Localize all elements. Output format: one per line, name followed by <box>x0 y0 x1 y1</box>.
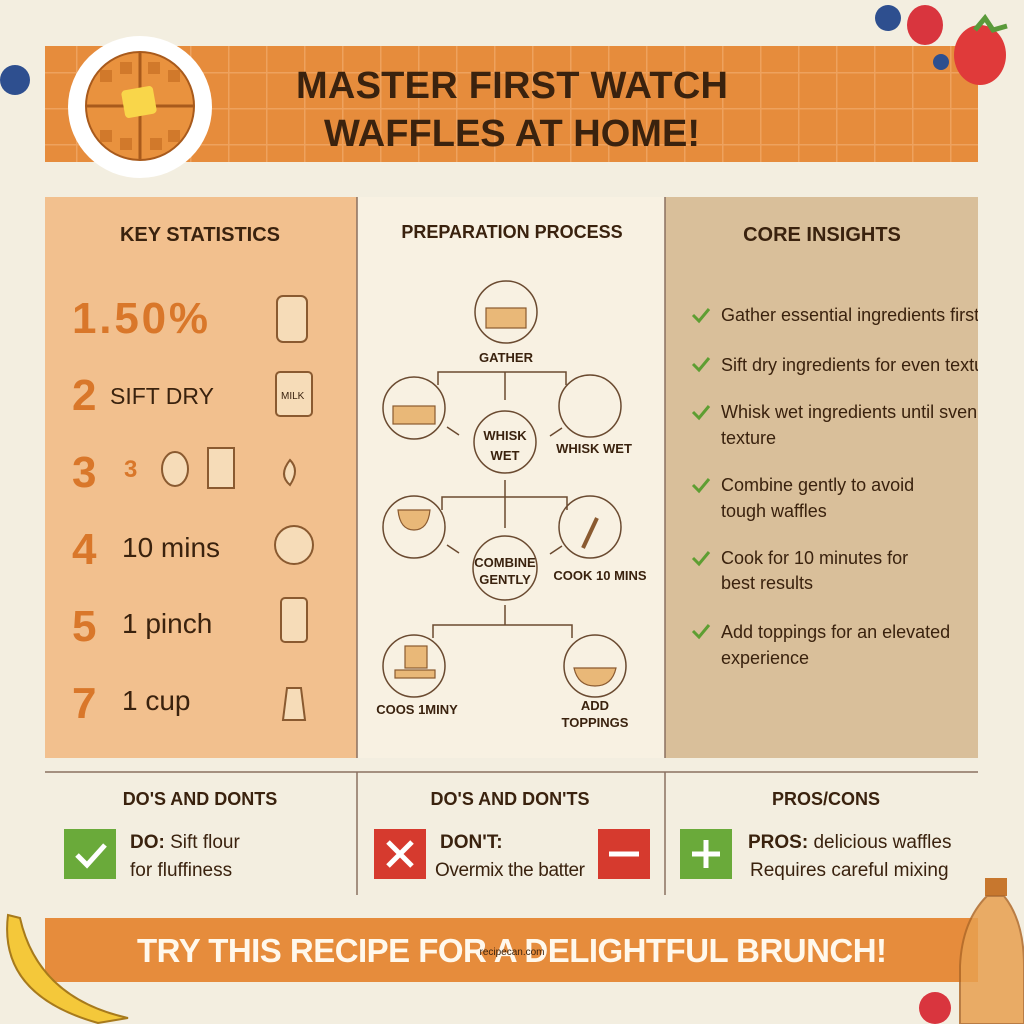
panel: core insights: Gather essential ingredients first <box>721 305 979 325</box>
panel: key statistics: 10 mins <box>122 532 220 563</box>
panel: key statistics: MILK <box>281 391 305 402</box>
panel: core insights: experience <box>721 648 809 668</box>
dont's: DON'T: <box>440 832 503 853</box>
panel: preparation process <box>357 197 665 758</box>
icon: berries <box>0 5 1007 95</box>
pros/cons: PROS: delicious waffles <box>748 832 951 853</box>
panel: key statistics: 1 cup <box>122 685 190 716</box>
panel: preparation process: WET <box>491 448 519 463</box>
panel: core insights: Cook for 10 minutes for <box>721 548 908 568</box>
do's <box>64 789 277 881</box>
title: MASTER FIRST WATCH <box>296 65 728 107</box>
do's: for fluffiness <box>130 860 232 881</box>
panel: preparation process: PREPARATION PROCESS <box>401 222 623 242</box>
icon: syrup bottle <box>919 878 1024 1024</box>
footer banner: recipecan.com <box>479 947 545 958</box>
pros/cons: PROS/CONS <box>772 789 880 809</box>
panel: key statistics: 1.50% <box>72 294 208 343</box>
panel: core insights: texture <box>721 428 776 448</box>
panel: core insights: best results <box>721 573 813 593</box>
panel: key statistics: SIFT DRY <box>110 383 214 409</box>
do's: DO'S AND DONTS <box>123 789 277 809</box>
panel: core insights: Sift dry ingredients for even textu <box>721 355 984 375</box>
panel: preparation process: COOS 1MINY <box>376 702 458 717</box>
panel: key statistics: 5 <box>72 602 96 651</box>
footer banner <box>45 918 978 982</box>
panel: preparation process: GATHER <box>479 350 534 365</box>
panel: key statistics: 1 pinch <box>122 608 212 639</box>
panel: core insights: CORE INSIGHTS <box>743 224 901 246</box>
dont's: DO'S AND DON'TS <box>431 789 589 809</box>
footer banner: TRY THIS RECIPE FOR A DELIGHTFUL BRUNCH! <box>137 932 887 969</box>
panel: preparation process: WHISK WET <box>556 441 632 456</box>
panel: preparation process: ADD <box>581 698 609 713</box>
dont's <box>374 789 650 881</box>
dont's: Overmix the batter <box>435 860 586 881</box>
panel: key statistics: 7 <box>72 679 96 728</box>
panel: core insights: Add toppings for an elevated <box>721 622 950 642</box>
header banner <box>45 46 978 162</box>
do's: DO: Sift flour <box>130 832 240 853</box>
pros/cons <box>680 789 951 881</box>
icon: waffle plate <box>68 36 212 178</box>
icon: banana <box>7 915 128 1023</box>
header banner: WAFFLES AT HOME! <box>324 113 700 155</box>
icons: stats <box>162 296 313 720</box>
panel: key statistics: 4 <box>72 525 97 574</box>
panel: preparation process: COOK 10 MINS <box>553 568 647 583</box>
panel: preparation process: WHISK <box>483 428 527 443</box>
pros/cons: Requires careful mixing <box>750 860 949 881</box>
panel: key statistics: 3 <box>72 448 96 497</box>
panel: preparation process: TOPPINGS <box>562 715 629 730</box>
panel: key statistics: KEY STATISTICS <box>120 224 280 246</box>
bottom sections <box>45 772 978 895</box>
panel: key statistics: 2 <box>72 371 96 420</box>
panel: preparation process: GENTLY <box>479 572 531 587</box>
panel: core insights: tough waffles <box>721 501 827 521</box>
panel: core insights: Combine gently to avoid <box>721 475 914 495</box>
panel: key statistics: 3 <box>124 456 137 483</box>
panel: key statistics <box>45 197 357 758</box>
panel: preparation process: COMBINE <box>474 555 536 570</box>
panel: core insights <box>665 197 984 758</box>
panel: core insights: Whisk wet ingredients until sven <box>721 402 977 422</box>
